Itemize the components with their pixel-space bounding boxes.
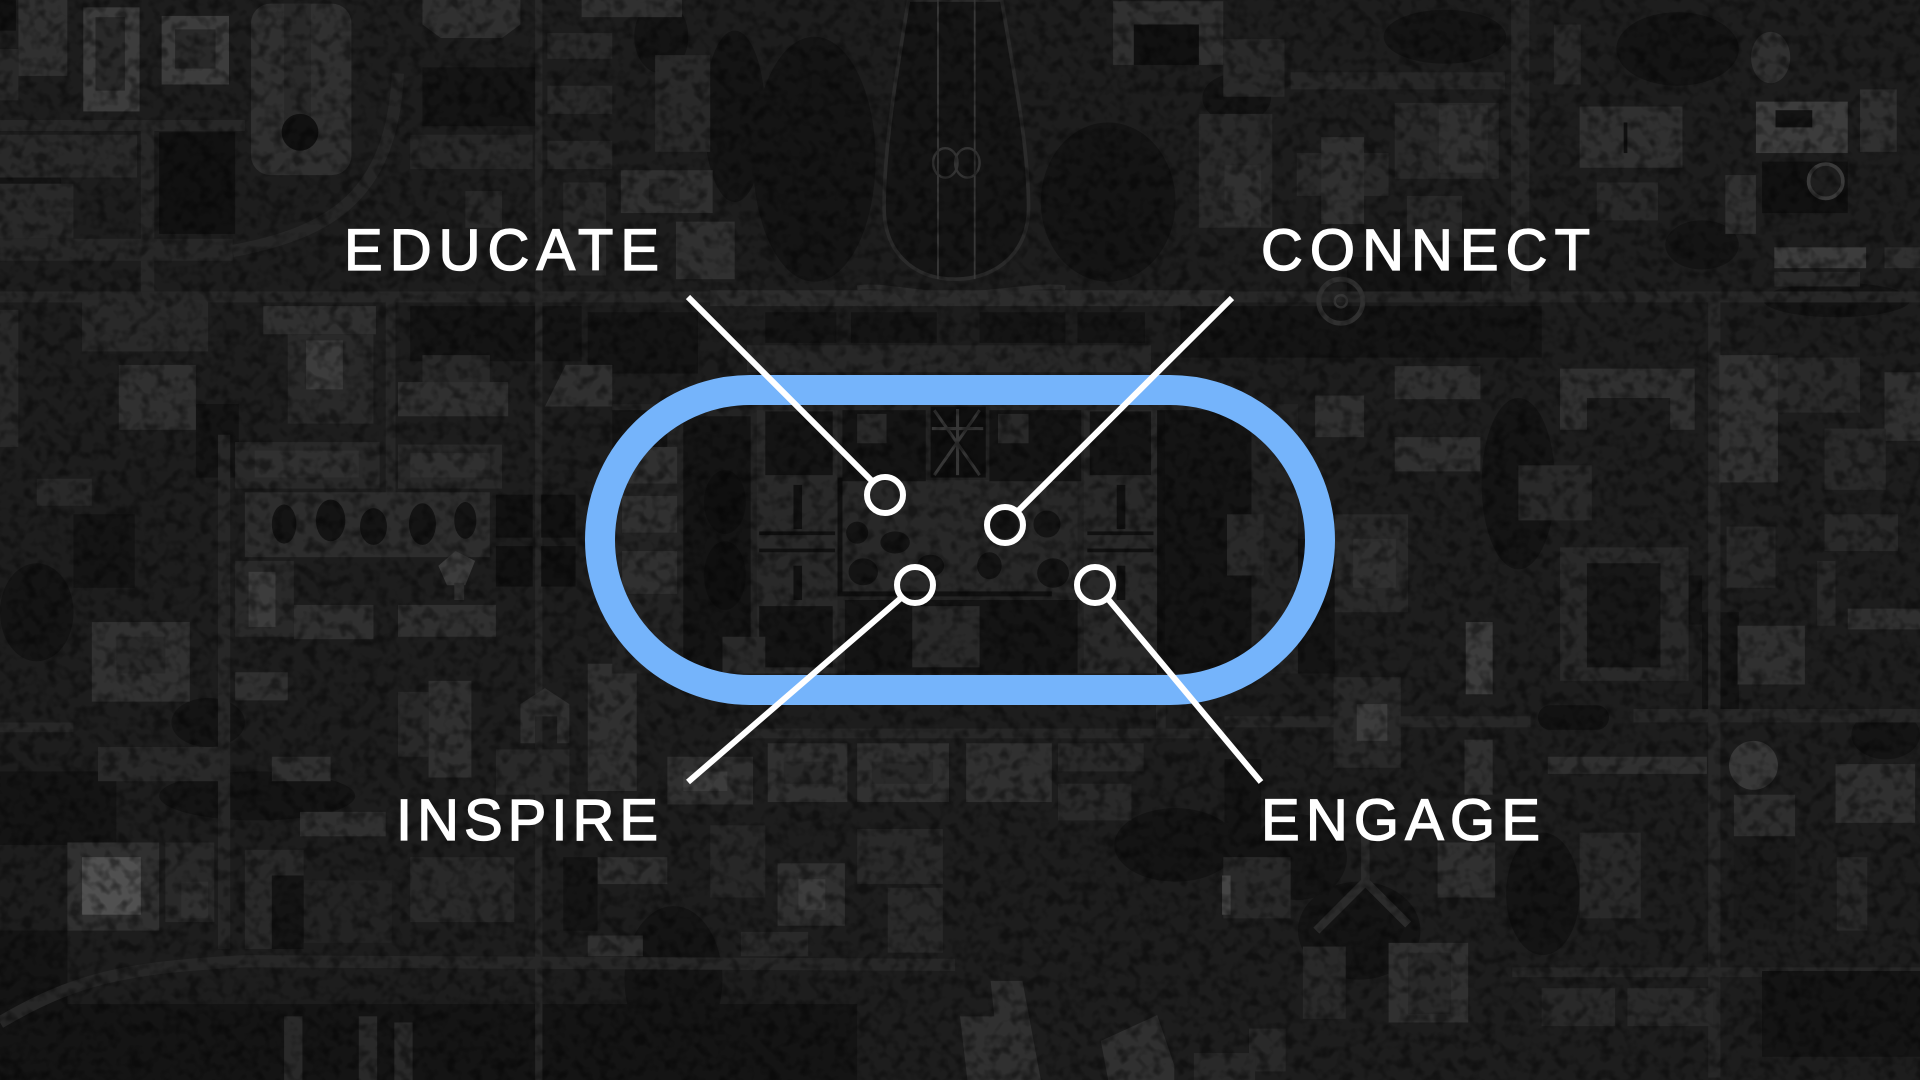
leader line: educate	[688, 297, 872, 481]
buildings: lower left	[67, 743, 949, 1080]
leader line: connect	[1018, 298, 1232, 511]
buildings: top left	[0, 0, 735, 279]
buildings: lower right	[960, 677, 1920, 1080]
callout: educate	[344, 218, 903, 513]
leader line: engage	[1108, 599, 1261, 782]
callout: connect	[987, 218, 1590, 543]
buildings: top right	[1113, 1, 1920, 323]
blue rounded ring	[600, 390, 1320, 690]
callout: inspire	[396, 567, 933, 853]
marker: inspire	[897, 567, 933, 603]
buildings: left middle	[0, 300, 637, 836]
marker: connect	[987, 507, 1023, 543]
marker: engage	[1077, 567, 1113, 603]
label: connect: CONNECT	[1261, 218, 1590, 283]
leader line: inspire	[688, 598, 901, 782]
callout: engage	[1077, 567, 1540, 853]
label: inspire: INSPIRE	[396, 788, 658, 853]
label: engage: ENGAGE	[1261, 788, 1540, 853]
buildings: central complex inside ring	[612, 404, 1298, 673]
label: educate: EDUCATE	[344, 218, 659, 283]
buildings: right middle	[1315, 355, 1920, 694]
reflecting mall	[747, 0, 1151, 372]
marker: educate	[867, 477, 903, 513]
